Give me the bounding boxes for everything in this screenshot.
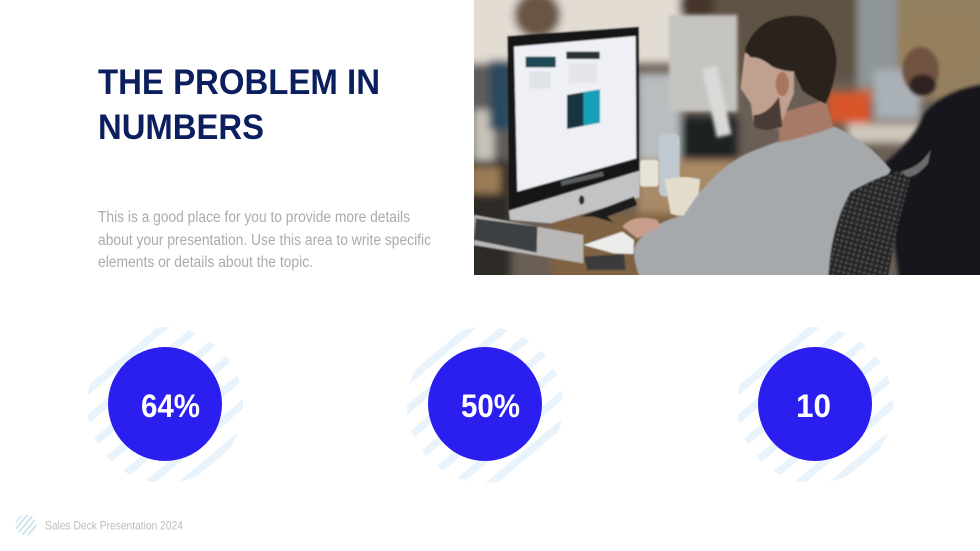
rear monitor <box>669 15 737 137</box>
stat: 64% <box>87 327 243 483</box>
woman on the right <box>884 41 980 275</box>
office chair <box>828 150 931 280</box>
desktop monitor <box>507 27 640 223</box>
laptop and keyboard <box>474 215 634 270</box>
description text: about your presentation. Use this area to write specific <box>98 232 431 249</box>
photo: man working at a desktop computer in an office <box>454 0 980 293</box>
footer <box>16 514 183 536</box>
stat: 10 <box>737 327 893 483</box>
title: THE PROBLEM IN <box>98 63 380 102</box>
title: NUMBERS <box>98 108 264 147</box>
bottle and cup <box>640 133 700 216</box>
man in grey sweater <box>622 16 891 280</box>
blue circle <box>108 347 222 461</box>
footer text: Sales Deck Presentation 2024 <box>45 518 183 532</box>
value: 64% <box>141 388 200 424</box>
title <box>98 63 380 147</box>
striped halo <box>737 327 893 483</box>
value: 10 <box>796 388 831 424</box>
description text: This is a good place for you to provide more details <box>98 209 410 226</box>
description text <box>98 209 431 271</box>
striped halo <box>407 327 563 483</box>
blue circle <box>758 347 872 461</box>
stat: 50% <box>407 327 563 483</box>
description text: elements or details about the topic. <box>98 254 313 271</box>
value: 50% <box>461 388 520 424</box>
icon: striped circle <box>16 514 36 536</box>
blue circle <box>428 347 542 461</box>
striped halo <box>87 327 243 483</box>
